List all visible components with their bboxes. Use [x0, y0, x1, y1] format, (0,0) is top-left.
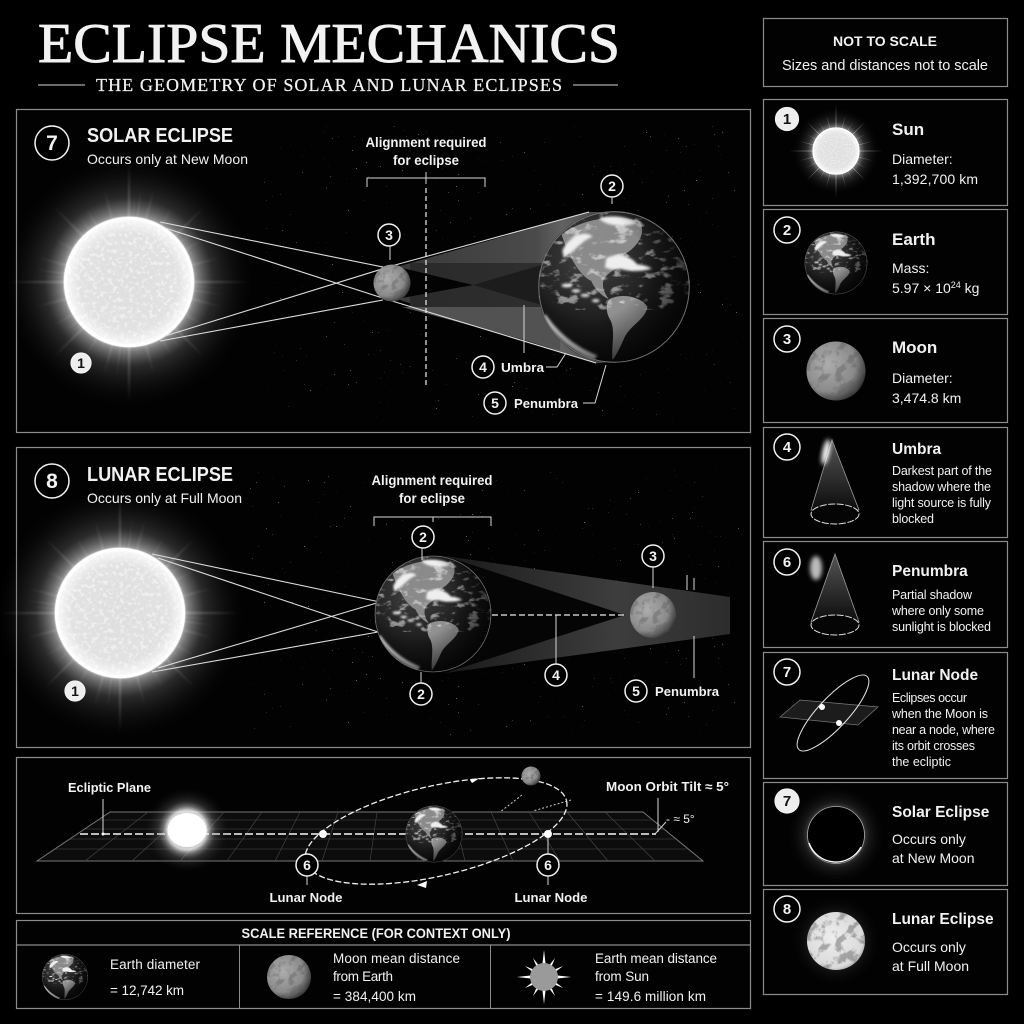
- alignment bracket: for eclipse: [393, 152, 459, 168]
- lunar nodes: Lunar Node: [514, 890, 588, 905]
- legend card: lunar eclipse: at Full Moon: [892, 958, 969, 974]
- scale item: earth: [42, 954, 200, 1000]
- ecliptic plane grid: [37, 812, 703, 861]
- callouts: Umbra: [501, 360, 545, 375]
- legend card: lunar node: the ecliptic: [892, 755, 951, 769]
- alignment bracket: [372, 472, 492, 526]
- scale item: earth: Earth diameter: [110, 957, 200, 972]
- legend card: lunar eclipse: Occurs only: [892, 939, 966, 955]
- legend card: umbra: Darkest part of the: [892, 464, 992, 478]
- panel: not to scale note: Sizes and distances not to scale: [782, 58, 988, 74]
- callouts: Penumbra: [655, 684, 720, 699]
- legend card: sun: 1: [783, 111, 791, 128]
- legend card: penumbra: sunlight is blocked: [892, 620, 991, 634]
- heading: SOLAR ECLIPSE: [87, 125, 233, 147]
- lunar nodes: Lunar Node: [270, 890, 342, 905]
- sun: [0, 485, 248, 741]
- legend card: umbra: [764, 428, 1008, 538]
- legend card: earth: 24: [951, 280, 961, 290]
- legend card: penumbra: Penumbra: [892, 563, 968, 580]
- legend card: earth: [764, 210, 1008, 314]
- label: moon orbit tilt: Moon Orbit Tilt ≈ 5°: [606, 779, 729, 794]
- panel: lunar eclipse: [0, 448, 750, 748]
- heading: Occurs only at Full Moon: [87, 490, 242, 506]
- legend card: umbra: light source is fully: [892, 496, 992, 510]
- earth: [406, 806, 462, 862]
- heading: 7: [46, 132, 58, 155]
- heading: LUNAR ECLIPSE: [87, 464, 233, 486]
- legend card: moon: 3: [783, 331, 791, 348]
- legend card: solar eclipse: at New Moon: [892, 850, 974, 866]
- callouts: 3: [385, 227, 393, 243]
- legend card: solar eclipse: Solar Eclipse: [892, 804, 990, 821]
- alignment bracket: Alignment required: [372, 472, 492, 488]
- scale item: sun: from Sun: [595, 969, 649, 984]
- callouts: [65, 526, 720, 705]
- callouts: [71, 175, 623, 414]
- scale item: moon: [267, 951, 460, 1004]
- scale item: sun: [517, 950, 717, 1004]
- legend card: lunar node: near a node, where: [892, 723, 995, 737]
- legend card: sun: Diameter:: [892, 151, 953, 167]
- moon orbit: [295, 757, 577, 905]
- lunar nodes: [102, 799, 588, 905]
- alignment bracket: [366, 134, 486, 385]
- scale item: sun: Earth mean distance: [595, 951, 717, 966]
- scale item: earth: = 12,742 km: [110, 983, 184, 998]
- label: moon orbit tilt: - ≈ 5°: [666, 812, 695, 826]
- heading: [35, 125, 248, 167]
- legend card: umbra: 4: [783, 439, 792, 456]
- legend card: lunar node: when the Moon is: [891, 707, 988, 721]
- legend card: penumbra: where only some: [891, 604, 984, 618]
- label: moon orbit tilt: [606, 779, 729, 834]
- panel: not to scale note: [764, 18, 1008, 86]
- legend card: lunar node: Lunar Node: [892, 667, 978, 684]
- scale item: moon: from Earth: [333, 969, 393, 984]
- legend card: moon: 3,474.8 km: [892, 390, 961, 406]
- umbra axis: [492, 614, 625, 616]
- sun: [143, 786, 231, 874]
- legend card: penumbra: Partial shadow: [892, 588, 973, 602]
- callouts: 4: [552, 667, 560, 683]
- legend card: moon: Diameter:: [892, 370, 953, 386]
- heading: Occurs only at New Moon: [87, 151, 248, 167]
- callouts: 1: [77, 355, 85, 371]
- alignment bracket: for eclipse: [399, 490, 465, 506]
- callouts: 3: [649, 548, 657, 564]
- legend card: lunar node: [764, 652, 1008, 778]
- subtitle: THE GEOMETRY OF SOLAR AND LUNAR ECLIPSES: [96, 75, 562, 95]
- callouts: Penumbra: [514, 396, 579, 411]
- legend card: earth: 2: [783, 222, 791, 239]
- lunar nodes: 6: [303, 857, 311, 873]
- scale item: moon: Moon mean distance: [333, 951, 460, 966]
- legend card: solar eclipse: 7: [783, 793, 791, 810]
- shadow cone: [445, 556, 730, 673]
- moon: [374, 264, 410, 302]
- legend card: penumbra: [764, 542, 1008, 648]
- legend card: lunar eclipse: Lunar Eclipse: [892, 911, 994, 928]
- callouts: 5: [491, 395, 499, 411]
- legend card: moon: Moon: [892, 338, 937, 357]
- legend card: umbra: shadow where the: [892, 480, 991, 494]
- label: ecliptic plane: Ecliptic Plane: [68, 780, 151, 795]
- legend card: lunar node: 7: [783, 664, 791, 681]
- legend card: lunar eclipse: [764, 890, 1008, 994]
- legend card: solar eclipse: Occurs only: [892, 831, 966, 847]
- legend card: sun: 1,392,700 km: [892, 171, 978, 187]
- shadow cone: [400, 212, 625, 363]
- legend card: earth: Mass:: [892, 260, 929, 276]
- legend card: solar eclipse: [764, 782, 1008, 886]
- title: ECLIPSE MECHANICS: [38, 13, 620, 75]
- legend card: umbra: Umbra: [892, 441, 941, 458]
- earth: [374, 556, 492, 672]
- starfield: [250, 470, 740, 735]
- lunar nodes: 6: [544, 857, 552, 873]
- starfield: [260, 125, 740, 420]
- legend card: lunar node: Eclipses occur: [892, 691, 967, 705]
- callouts: 4: [479, 359, 487, 375]
- callouts: 5: [632, 683, 640, 699]
- heading: 8: [46, 470, 58, 493]
- callouts: 2: [417, 686, 425, 702]
- legend card: penumbra: 6: [783, 554, 791, 571]
- callouts: 2: [419, 529, 427, 545]
- panel: solar eclipse: [1, 110, 750, 432]
- sun: [1, 154, 257, 410]
- panel: ecliptic and moon orbit: [16, 757, 750, 914]
- legend card: moon: [764, 318, 1008, 422]
- moon: [522, 766, 540, 786]
- heading: [35, 464, 242, 506]
- callouts: 1: [71, 683, 79, 699]
- light rays: [160, 212, 596, 363]
- earth: [538, 211, 690, 363]
- legend card: earth: kg: [961, 280, 979, 296]
- legend card: lunar eclipse: 8: [783, 901, 791, 918]
- legend card: umbra: blocked: [892, 512, 934, 526]
- legend card: earth: Earth: [892, 230, 935, 249]
- panel: scale reference: SCALE REFERENCE (FOR CONTEXT ONLY): [242, 926, 510, 941]
- scale item: moon: = 384,400 km: [333, 989, 416, 1004]
- panel: scale reference: [16, 920, 750, 1009]
- legend card: lunar node: its orbit crosses: [892, 739, 975, 753]
- legend card: sun: Sun: [892, 120, 924, 139]
- panel: not to scale note: NOT TO SCALE: [833, 33, 937, 49]
- moon: [630, 592, 676, 638]
- scale item: sun: = 149.6 million km: [595, 989, 706, 1004]
- light rays: [152, 554, 380, 672]
- legend card: sun: [764, 100, 1008, 206]
- legend card: earth: 5.97 × 10: [892, 280, 951, 296]
- callouts: 2: [608, 178, 616, 194]
- alignment bracket: Alignment required: [366, 134, 486, 150]
